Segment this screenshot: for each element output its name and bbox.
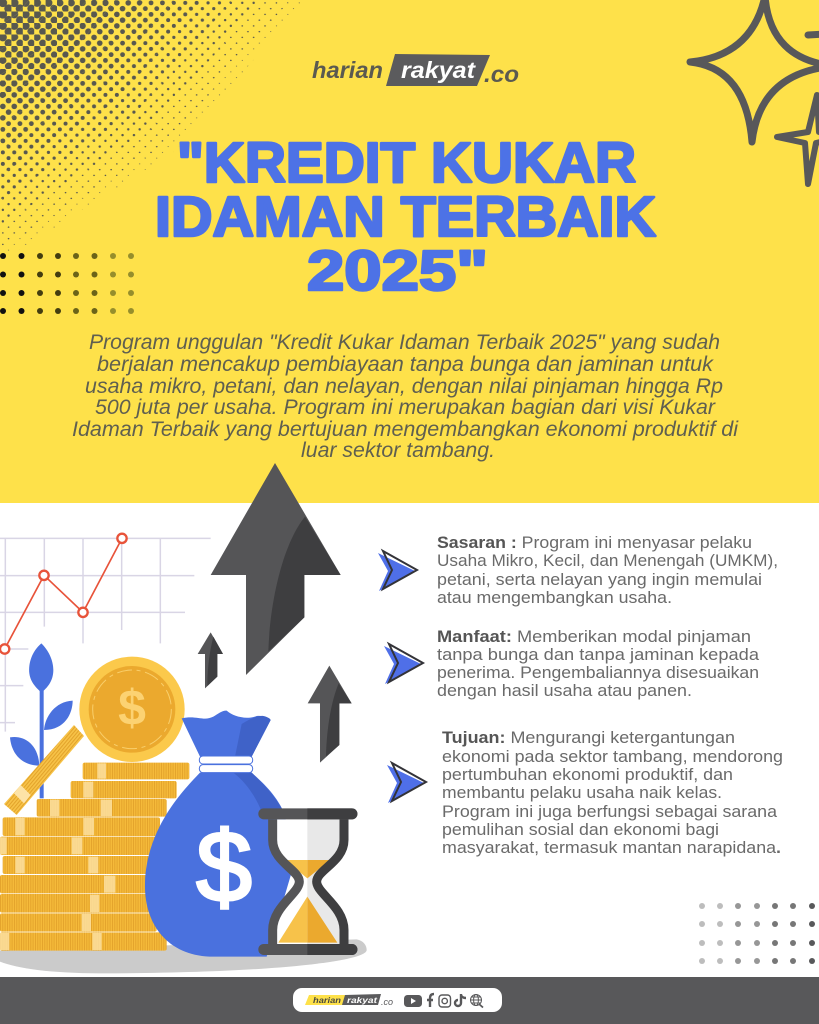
logo: harian rakyat: [312, 54, 519, 87]
halftone dot pattern: [0, 0, 305, 262]
arrow: large up arrow: [211, 463, 341, 675]
title: [155, 131, 656, 303]
text: Tujuan: masyarakat, termasuk mantan narapidana .: [442, 839, 781, 857]
icon: youtube: [404, 995, 422, 1007]
text: Sasaran: [437, 534, 778, 607]
footer logo: rakyat: [347, 995, 378, 1005]
logo: harian rakyat: rakyat: [401, 57, 476, 83]
icon: facebook: [427, 994, 434, 1007]
intro paragraph: berjalan mencakup pembiayaan tanpa bunga dan jaminan untuk: [97, 353, 715, 376]
icon: gold coin: [79, 657, 185, 762]
footer logo: .co: [381, 997, 393, 1007]
title: "KREDIT KUKAR: [177, 131, 636, 195]
dot grid bottom right: [699, 903, 815, 964]
text: Tujuan: ekonomi pada sektor tambang, mendorong: [442, 748, 783, 766]
title: IDAMAN TERBAIK: [155, 185, 656, 249]
ground shadow: [0, 939, 367, 973]
dot grid top left: [0, 253, 134, 314]
text: Manfaat: penerima. Pengembaliannya disesuaikan: [437, 664, 759, 682]
text: Tujuan: Tujuan: Mengurangi ketergantungan: [442, 729, 735, 747]
icon: chevron arrow 3: [387, 763, 426, 803]
icon: instagram: [439, 995, 450, 1007]
text: Sasaran: atau mengembangkan usaha.: [437, 589, 672, 607]
text: Manfaat: tanpa bunga dan tanpa jaminan kepada: [437, 646, 760, 664]
text: Manfaat: [437, 628, 760, 700]
intro paragraph: luar sektor tambang.: [301, 439, 495, 462]
footer logo: harian: [313, 995, 341, 1005]
yellow header background: [0, 0, 819, 503]
intro paragraph: Program unggulan "Kredit Kukar Idaman Terbaik 2025" yang sudah: [89, 331, 720, 354]
title: 2025": [307, 239, 488, 303]
text: Sasaran: Usaha Mikro, Kecil, dan Menengah (UMKM),: [437, 552, 778, 570]
icon: web globe: [470, 994, 483, 1008]
footer logo: [305, 994, 393, 1007]
icon: chevron arrow 2: [384, 644, 423, 684]
intro paragraph: 500 juta per usaha. Program ini merupakan bagian dari visi Kukar: [95, 396, 716, 419]
icon: chevron arrow 1: [378, 551, 417, 591]
intro paragraph: usaha mikro, petani, dan nelayan, dengan nilai pinjaman hingga Rp: [85, 375, 723, 398]
text: Tujuan: membantu pelaku usaha naik kelas.: [442, 784, 722, 802]
text: Tujuan: pemulihan sosial dan ekonomi bagi: [442, 821, 719, 839]
icon: hourglass: [258, 808, 357, 955]
icon: blue plant: [10, 643, 73, 798]
arrow: small up arrow: [198, 632, 223, 688]
text: Sasaran: petani, serta nelayan yang ingin memulai: [437, 571, 762, 589]
icon: money bag: $: [196, 811, 252, 923]
icon: gold coin: $: [118, 680, 146, 736]
icon: tiktok: [455, 994, 466, 1006]
icon: sparkles: [690, 0, 819, 184]
text: Manfaat: dengan hasil usaha atau panen.: [437, 682, 692, 700]
text: Manfaat: Manfaat: Memberikan modal pinjaman: [437, 628, 751, 646]
intro paragraph: Idaman Terbaik yang bertujuan mengembangkan ekonomi produktif di: [72, 418, 739, 441]
white content background: [0, 503, 819, 977]
text: Tujuan: [442, 729, 783, 857]
icon: money bag: [145, 711, 293, 957]
intro paragraph: [72, 331, 739, 462]
illustration: finance growth: [0, 463, 367, 973]
text: Sasaran: Sasaran : Program ini menyasar pelaku: [437, 534, 752, 552]
footer bar: [0, 977, 819, 1024]
text: Tujuan: pertumbuhan ekonomi produktif, dan: [442, 766, 733, 784]
text: Tujuan: Program ini juga berfungsi sebagai sarana: [442, 803, 778, 821]
icon: coin roll: [4, 725, 84, 815]
logo: harian rakyat: harian: [312, 57, 383, 83]
footer pill with logo and social icons: [293, 988, 502, 1012]
logo: harian rakyat: .co: [484, 61, 519, 87]
chart: grid and red trend line: [0, 534, 211, 732]
arrow: medium up arrow: [308, 666, 352, 763]
coin stacks: [0, 763, 189, 951]
